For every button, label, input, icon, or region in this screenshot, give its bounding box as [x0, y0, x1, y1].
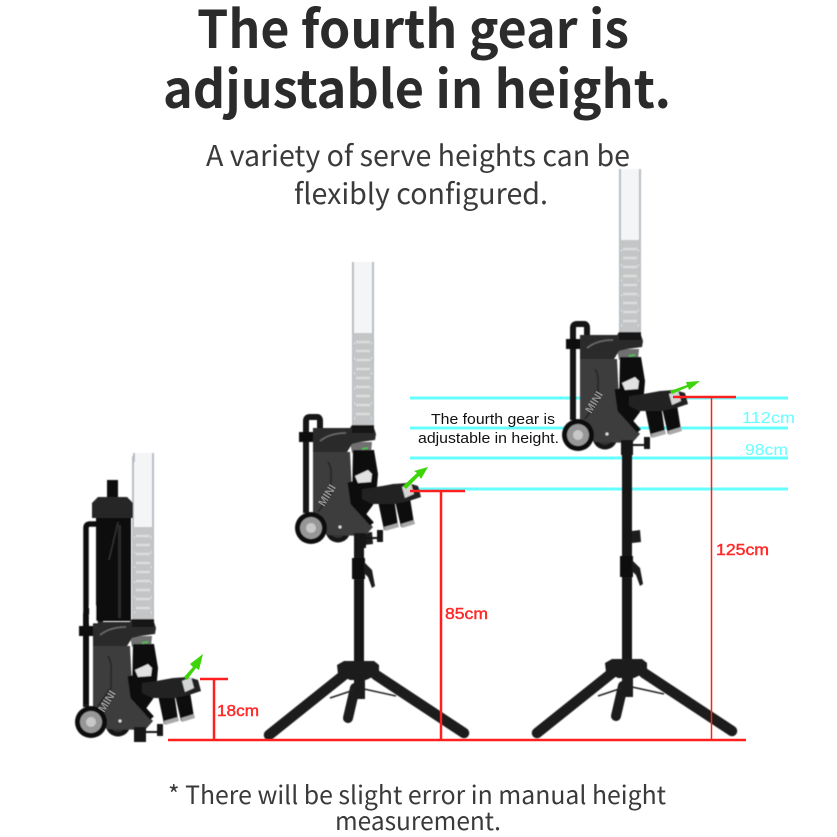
handle erase and long handle pole	[86, 524, 99, 704]
green launch arrows	[184, 381, 700, 680]
red dimension lines	[168, 397, 746, 740]
arrow: high machine	[670, 381, 700, 394]
machine: high position, 125cm	[537, 169, 732, 733]
machine logos: MINI	[583, 390, 606, 416]
machine logos	[96, 390, 606, 715]
machine body, low position	[75, 456, 201, 742]
machine logos: MINI	[316, 483, 339, 509]
height label: 18cm: 18cm	[217, 703, 259, 720]
callout: The fourth gear is	[431, 412, 555, 428]
machine body, right	[562, 169, 688, 455]
height label: 125cm: 125cm	[716, 542, 769, 559]
subtitle	[206, 134, 630, 213]
callout: adjustable in height.	[418, 431, 559, 447]
footnote: measurement.	[335, 802, 501, 837]
subtitle: A variety of serve heights can be	[206, 134, 630, 175]
title: adjustable in height.	[163, 48, 671, 123]
height label: 98cm: 98cm	[745, 442, 788, 459]
subtitle: flexibly configured.	[294, 172, 548, 213]
cyan height guide lines	[410, 398, 788, 489]
height label: 85cm: 85cm	[445, 606, 488, 623]
arrow: middle machine	[403, 467, 428, 489]
title	[163, 0, 671, 123]
machine body, middle	[295, 262, 421, 548]
height label: 112cm: 112cm	[742, 410, 795, 427]
machine: low position, 18cm	[75, 453, 201, 742]
folded tripod parts on low machine	[92, 480, 133, 621]
machine logos: MINI	[96, 689, 119, 715]
extended tube top	[133, 453, 154, 462]
machine: middle position, 85cm	[269, 262, 464, 735]
arrow: low machine	[184, 654, 203, 680]
tripod, middle	[269, 532, 464, 735]
tripod, right	[537, 430, 732, 733]
callout	[418, 412, 559, 447]
footnote	[168, 776, 667, 837]
footnote: * There will be slight error in manual height	[168, 776, 667, 812]
